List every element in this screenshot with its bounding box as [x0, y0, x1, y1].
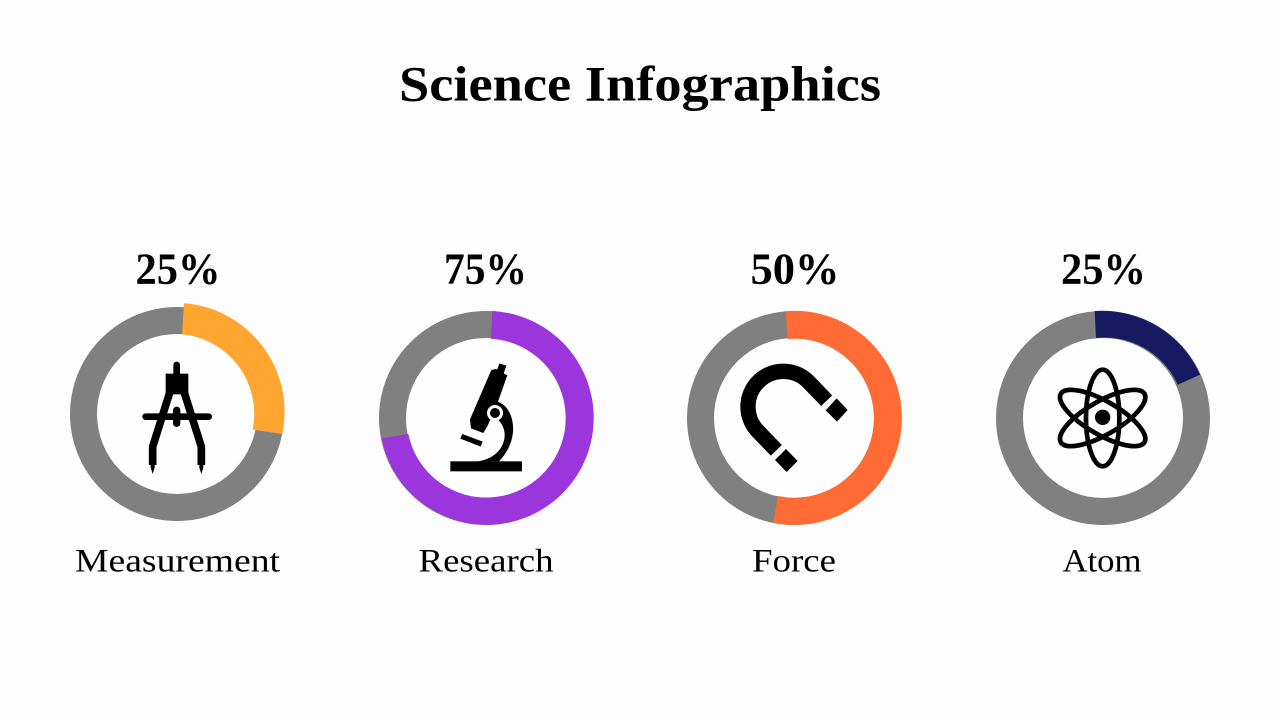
panel: measurement: [75, 244, 285, 580]
label: atom: Atom: [1062, 544, 1142, 580]
percentage: measurement: 25%: [136, 244, 220, 294]
donut track: measurement: [84, 320, 270, 508]
label: measurement: Measurement: [75, 544, 280, 580]
donut track: force: [700, 324, 888, 512]
donut track: atom: [1010, 324, 1196, 512]
label: force: Force: [752, 544, 836, 580]
donut segment: atom 25%: [1095, 311, 1200, 385]
panel: force: [700, 244, 902, 580]
title: Science Infographics: [399, 56, 881, 112]
donut segment: measurement 25%: [182, 303, 285, 434]
donut track: research: [392, 324, 580, 512]
percentage: force: 50%: [750, 244, 840, 294]
percentage: atom: 25%: [1061, 244, 1146, 294]
percentage: research: 75%: [444, 244, 527, 294]
panel: research: [382, 244, 594, 580]
panel: atom: [1010, 244, 1200, 580]
icon: microscope: [450, 363, 522, 471]
donut segment: research 75%: [382, 311, 594, 525]
icon: horseshoe magnet: [748, 371, 848, 472]
label: research: Research: [418, 544, 554, 580]
icon: drawing compass: [146, 365, 209, 474]
donut segment: force 50%: [773, 311, 902, 525]
icon: atom: [1052, 370, 1153, 466]
